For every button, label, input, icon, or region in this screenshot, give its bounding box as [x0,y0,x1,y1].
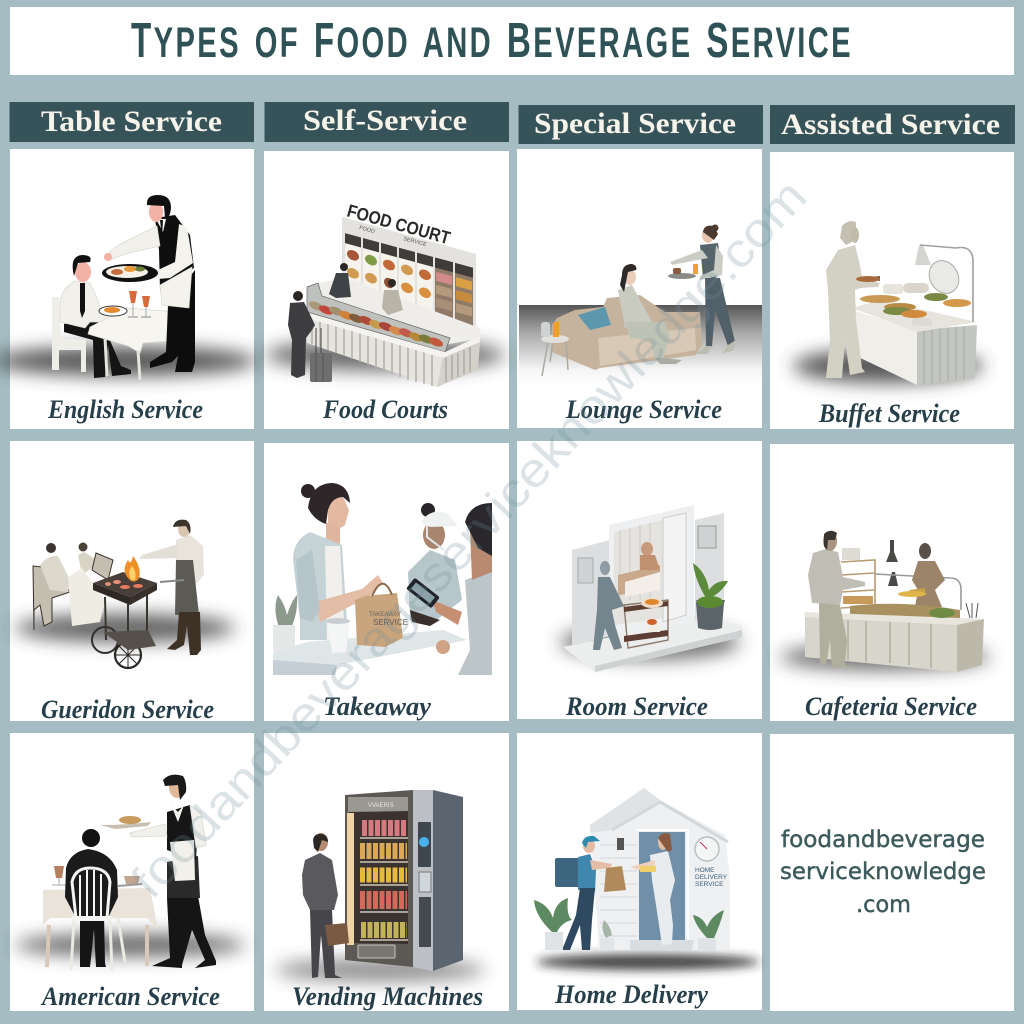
column header: Assisted Service: Assisted Service [781,108,1000,141]
icon: woman packing bag: TAKEAWAY [369,612,401,618]
panel: Takeaway [264,443,509,721]
icon: customer with briefcase [302,833,349,978]
column header: Special Service: Special Service [534,107,736,140]
label: Vending Machines [292,982,483,1011]
icon: waiter with plate [100,775,216,968]
panel: website credit [770,734,1014,1011]
icon: flambé cart [92,556,157,668]
icon: sofa and side table [541,295,702,376]
panel: Cafeteria Service [770,444,1014,721]
panel: Buffet Service [770,152,1014,429]
icon: vending machine [345,790,463,971]
panel: English Service [0,149,257,429]
label: Home Delivery [554,980,708,1009]
icon: seated guest [618,264,682,364]
column header: Self-Service: Self-Service [303,104,467,137]
label: Lounge Service [565,395,722,424]
title banner [10,7,1014,75]
icon: display counter with food [307,283,480,387]
icon: diners at table [33,542,113,630]
icon: house: SERVICE [695,881,724,888]
icon: woman packing bag [293,483,408,653]
icon: food court sign and menu boards: FOOD [358,225,375,235]
icon: plant and counter [273,595,467,675]
icon: server with tray [668,224,736,354]
panel: American Service [10,733,254,1011]
panel: Room Service [517,441,762,721]
icon: waiter with platter [102,195,195,372]
icon: food court sign and menu boards: SERVICE [402,236,428,248]
panel: Gueridon Service [10,441,254,724]
icon: customer figure [808,531,865,668]
panel: Food Courts [264,151,509,429]
icon: chef at cart [139,520,204,655]
icon: house: HOME [695,867,715,874]
icon: buffet table with dishes [852,245,977,385]
column header: Self-Service [264,102,509,142]
icon: food court sign and menu boards: FOOD COURT [345,201,452,248]
icon: table and seated guest [43,829,158,970]
panel: Lounge Service [517,149,762,428]
icon: vending machine: VVAERIS [368,803,394,809]
title banner: TYPES OF FOOD AND BEVERAGE SERVICE [131,14,853,68]
icon: shelf and lamps [841,540,961,610]
icon: house [590,788,730,950]
watermark: foodandbeverageserviceknowledge.com [121,170,817,909]
label: Room Service [565,692,708,721]
website text [780,825,986,918]
label: Cafeteria Service [805,692,977,721]
label: Gueridon Service [41,695,214,724]
icon: seated guest and table [52,255,187,380]
label: Takeaway [323,692,431,721]
icon: staff with headset [408,503,462,626]
icon: potted plant [693,563,728,630]
icon: courier with bag and backpack [555,836,626,950]
icon: server figure [826,221,880,378]
label: English Service [47,395,203,424]
icon: woman packing bag: SERVICE [373,618,408,627]
label: Food Courts [322,395,448,424]
icon: staff behind the counter [310,263,480,345]
icon: server woman [898,543,945,607]
website text: foodandbeverage [781,825,985,853]
panel: Vending Machines [264,733,509,1011]
label: American Service [40,982,220,1011]
website text: .com [856,890,911,918]
column header: Table Service [10,102,254,142]
icon: serving counter [804,603,984,672]
label: Buffet Service [818,399,960,428]
icon: customer with phone [406,503,492,675]
icon: food court sign and menu boards [342,201,476,330]
icon: customer with suitcase [288,291,332,382]
icon: potted plants [534,898,724,951]
panel: Home Delivery [517,733,762,1010]
icon: customer at door [630,833,675,945]
column header: Table Service: Table Service [41,105,222,138]
icon: hotel room doorway [563,505,742,672]
icon: house: DELIVERY [695,874,728,881]
icon: attendant with cart [593,561,668,650]
column header: Special Service [518,105,763,144]
website text: serviceknowledge [780,857,986,885]
